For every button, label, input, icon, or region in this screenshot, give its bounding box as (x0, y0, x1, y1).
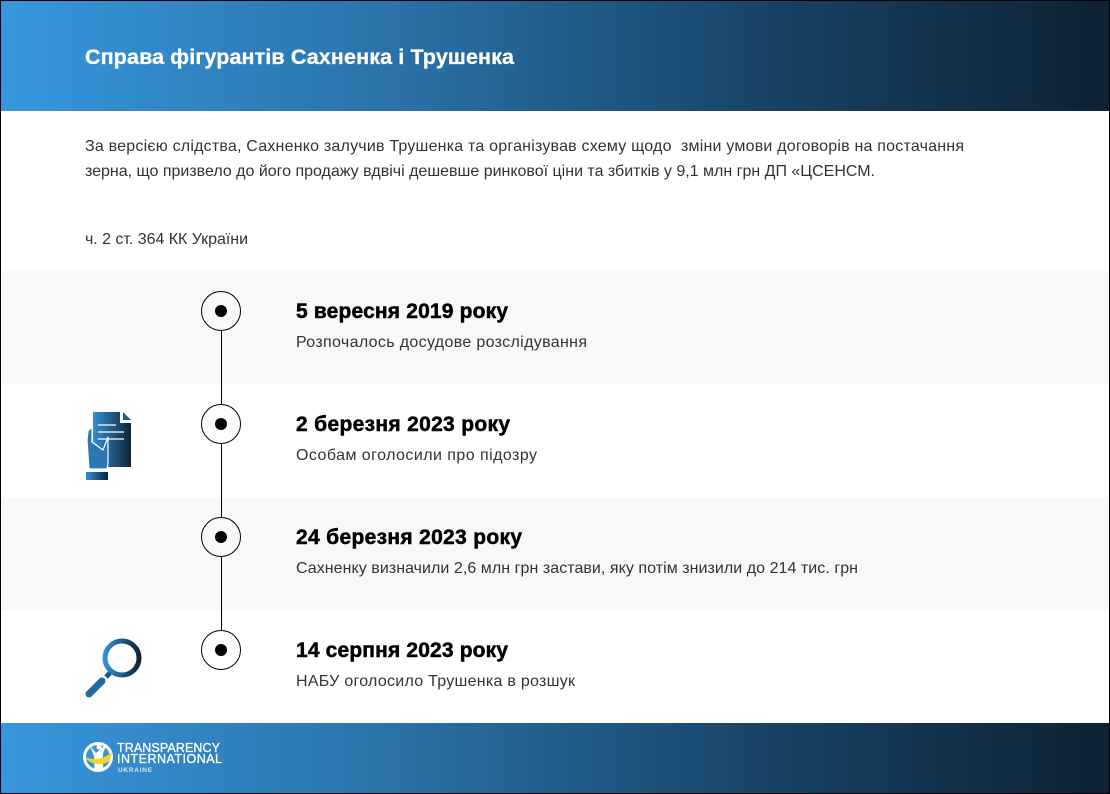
event 1: 5 вересня 2019 року (296, 300, 508, 323)
row backgrounds (0, 271, 1110, 610)
logo: Transparency International Ukraine: TRANSPARENCY (117, 741, 221, 755)
logo emblem (84, 744, 112, 771)
intro paragraph: зерна, що призвело до його продажу вдвічі дешевше ринкової ціни та збитків у 9,1 млн грн ДП «ЦСЕНСМ. (85, 163, 875, 180)
event 2 (202, 404, 537, 464)
event 3: Сахненку визначили 2,6 млн грн застави, яку потім знизили до 214 тис. грн (296, 560, 858, 577)
event 4 (202, 630, 576, 690)
intro paragraph (85, 138, 964, 180)
event 2: Особам оголосили про підозру (296, 447, 537, 464)
event 2: 2 березня 2023 року (296, 413, 510, 436)
logo: Transparency International Ukraine: INTERNATIONAL (117, 752, 222, 766)
legal article: ч. 2 ст. 364 КК України (85, 231, 248, 248)
event 4: 14 серпня 2023 року (296, 639, 508, 662)
logo: Transparency International Ukraine (84, 741, 222, 774)
event 3: 24 березня 2023 року (296, 526, 522, 549)
event 3 (202, 518, 858, 577)
event 1: Розпочалось досудове розслідування (296, 334, 587, 351)
header band (0, 0, 1110, 111)
timeline axis (220, 331, 222, 631)
footer band (0, 723, 1110, 794)
event 4: НАБУ оголосило Трушенка в розшук (296, 673, 576, 690)
icon: hand holding document (86, 412, 131, 480)
intro paragraph: За версією слідства, Сахненко залучив Трушенка та організував схему щодо зміни умови договорів на постачання (85, 138, 964, 155)
title: Справа фігурантів Сахненка і Трушенка (85, 45, 515, 69)
event 1 (202, 292, 587, 351)
icon: magnifying glass (89, 641, 139, 694)
logo: Transparency International Ukraine: UKRAINE (118, 767, 153, 774)
